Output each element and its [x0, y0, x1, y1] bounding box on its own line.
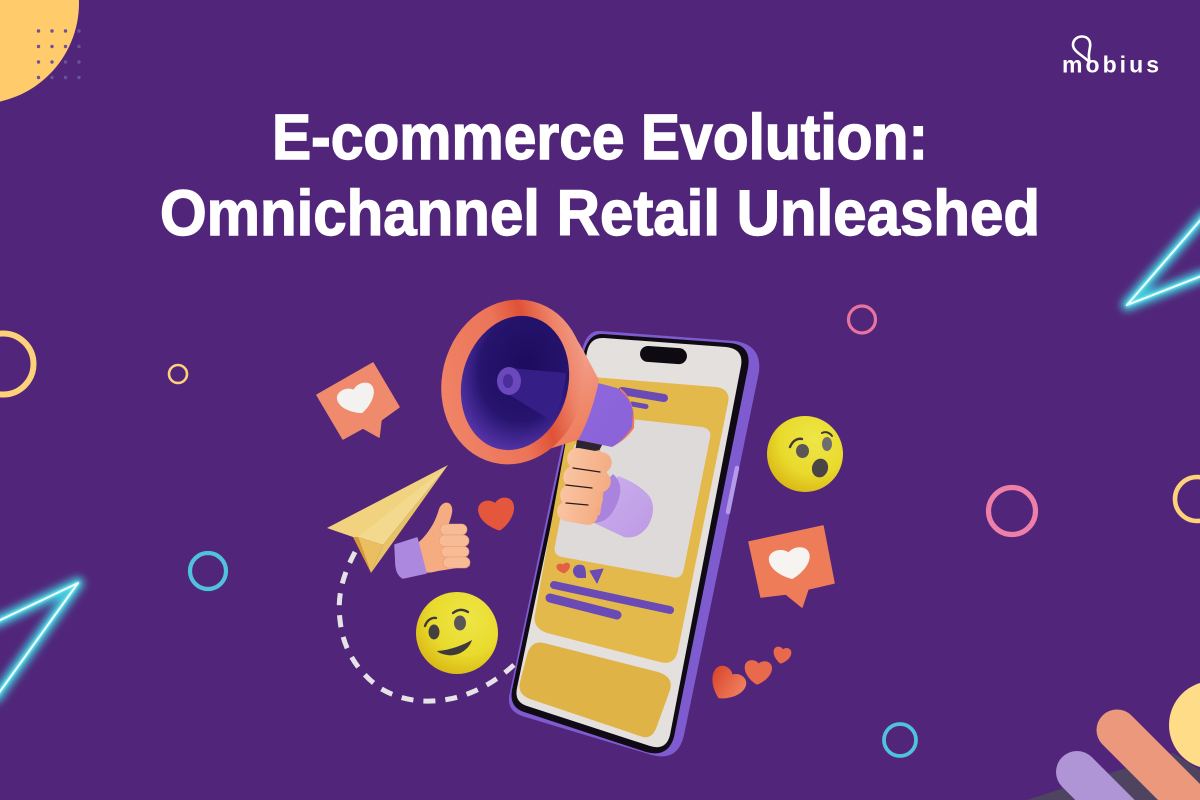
megaphone rim [424, 284, 602, 480]
post card [534, 377, 728, 663]
white heart [768, 546, 813, 582]
logo: mobius [1062, 36, 1159, 78]
megaphone mouth [446, 304, 584, 462]
post text bars [550, 585, 670, 615]
decoration: bottom right shapes [1027, 681, 1200, 800]
emoji: surprised [767, 416, 843, 492]
bottom card [519, 642, 671, 737]
hand holding megaphone [556, 446, 613, 526]
title: Omnichannel Retail Unleashed [160, 177, 1040, 249]
logo: mobius: mobius [1062, 52, 1159, 78]
paper plane [327, 465, 448, 573]
heart: centre [477, 496, 518, 534]
side button [728, 468, 737, 512]
megaphone driver [497, 367, 566, 421]
phone body [509, 331, 759, 756]
sleeve arm [582, 474, 653, 538]
megaphone body [578, 383, 633, 447]
notch [639, 345, 687, 365]
neon triangle: bottom left [0, 583, 78, 697]
megaphone cone [500, 301, 599, 464]
megaphone [424, 284, 634, 480]
thumbs up hand [395, 503, 470, 578]
dashed flight path [339, 552, 515, 701]
like bubble: right [749, 526, 834, 607]
thumb and palm [418, 503, 470, 573]
fingers [439, 524, 470, 568]
post image [555, 415, 710, 578]
header bars [622, 391, 664, 406]
megaphone handle grip [575, 440, 603, 455]
phone [509, 331, 759, 756]
megaphone rear edge [612, 388, 634, 447]
title: E-commerce Evolution: [272, 101, 928, 173]
post reaction icons [556, 562, 603, 583]
phone bezel [512, 334, 749, 753]
like bubble: left [317, 363, 399, 439]
decoration: top-left corner circle with dots [0, 0, 81, 104]
phone screen [516, 338, 741, 747]
white heart [335, 380, 380, 420]
hearts: trail [704, 646, 792, 707]
decorative rings [0, 306, 1200, 756]
neon triangle: top right [1127, 216, 1200, 305]
emoji: smiling [416, 592, 498, 674]
title [160, 101, 1040, 249]
cuff [395, 538, 426, 578]
